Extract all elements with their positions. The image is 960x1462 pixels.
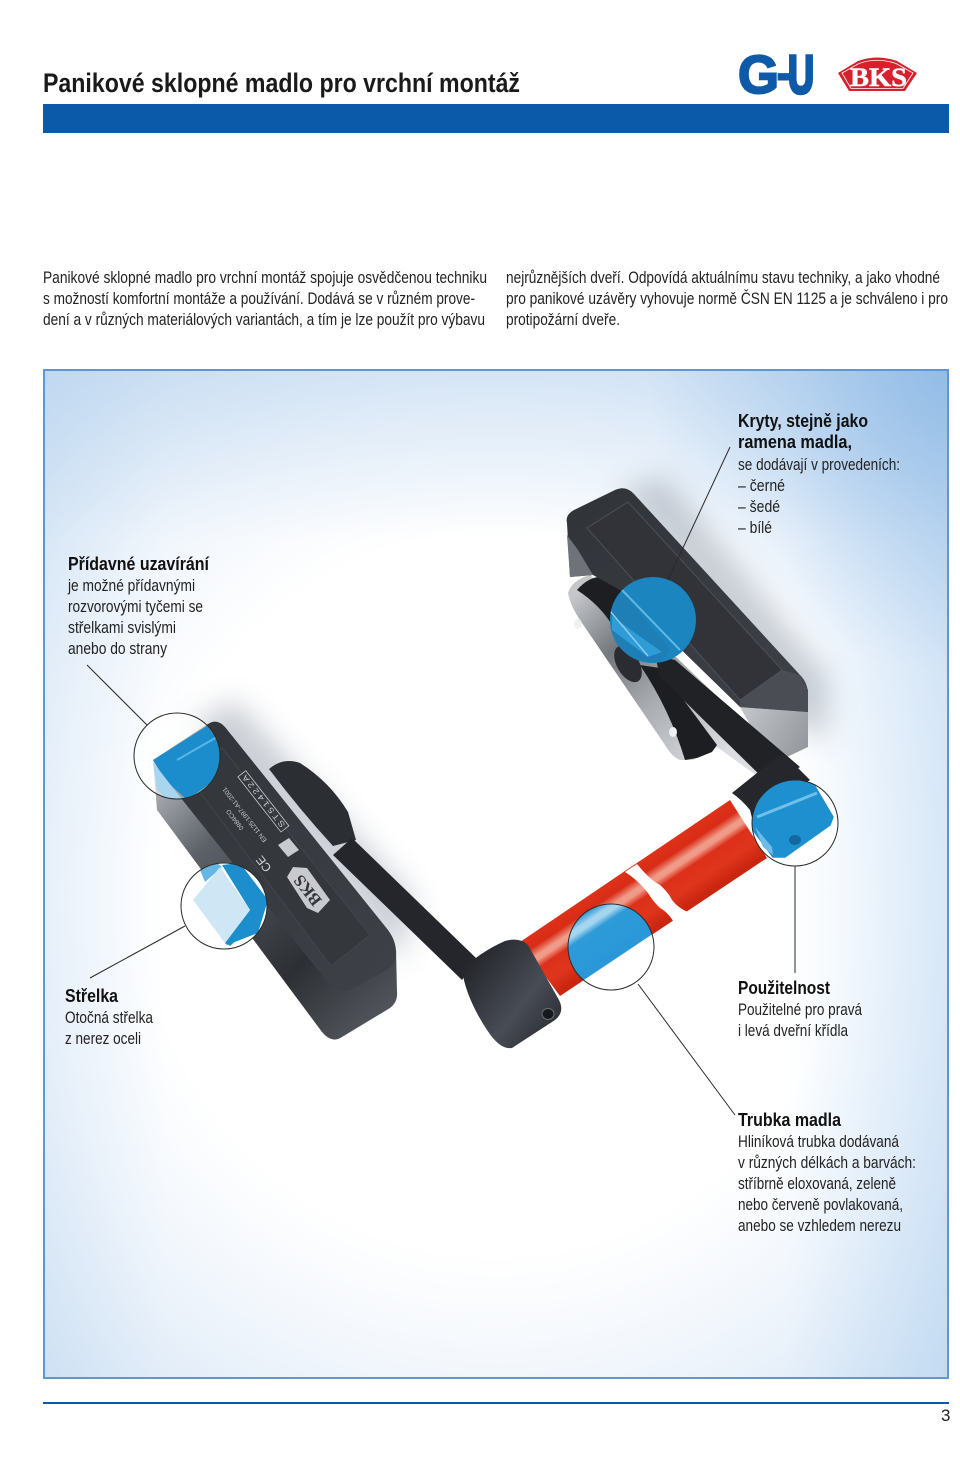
label: Kryty: ramena madla, bbox=[738, 432, 852, 452]
label: Trubka madla: anebo se vzhledem nerezu bbox=[738, 1216, 901, 1235]
lower mount: engraved marks: CE bbox=[253, 853, 274, 875]
logo: G-U: G bbox=[738, 45, 779, 105]
upper mount: top face bbox=[567, 488, 808, 712]
callout circle: Přídavné uzavírání bbox=[134, 713, 222, 801]
label: Kryty: – bílé bbox=[738, 518, 772, 537]
label: Kryty: – šedé bbox=[738, 497, 780, 516]
label: Trubka madla: Hliníková trubka dodávaná bbox=[738, 1132, 899, 1151]
upper mount: lever recess bbox=[608, 641, 648, 687]
label: Kryty bbox=[738, 411, 900, 537]
intro text right column: protipožární dveře. bbox=[506, 310, 620, 329]
intro text left column bbox=[43, 268, 487, 329]
product shadows bbox=[190, 475, 830, 960]
callout circle: Kryty bbox=[610, 577, 696, 663]
label: Trubka madla: stříbrně eloxovaná, zeleně bbox=[738, 1174, 896, 1193]
logo: G-U: U bbox=[788, 45, 814, 105]
label: Použitelnost: Použitelnost bbox=[738, 978, 830, 998]
label: Trubka madla: Trubka madla bbox=[738, 1110, 842, 1130]
label: Přídavné uzavírání: anebo do strany bbox=[68, 639, 167, 658]
upper mount: crescent bbox=[640, 665, 717, 760]
lower mount: engraved marks: BKS bbox=[290, 871, 326, 910]
lower mount: side face bbox=[153, 760, 397, 1040]
callout circle: Střelka bbox=[181, 863, 268, 949]
label: Kryty: Kryty, stejně jako bbox=[738, 411, 868, 431]
lower mount: top face bbox=[153, 722, 396, 991]
label: Střelka: Střelka bbox=[65, 986, 119, 1006]
label: Přídavné uzavírání: Přídavné uzavírání bbox=[68, 554, 210, 574]
panel: product background bbox=[43, 369, 949, 1379]
title: Panikové sklopné madlo pro vrchní montáž bbox=[43, 68, 520, 98]
label: Kryty: se dodávají v provedeních: bbox=[738, 455, 900, 474]
lower mount: pivot disc bbox=[269, 761, 356, 846]
header bar bbox=[43, 104, 949, 133]
logo: G-U: - bbox=[776, 43, 794, 103]
label: Přídavné uzavírání bbox=[67, 554, 210, 658]
right cap bbox=[732, 756, 810, 830]
upper mount: pivot disc bbox=[577, 577, 622, 625]
label: Přídavné uzavírání: je možné přídavnými bbox=[67, 576, 195, 595]
label: Trubka madla bbox=[738, 1110, 916, 1235]
upper mount: left side sheen bbox=[567, 535, 593, 577]
leader lines bbox=[87, 447, 795, 1115]
label: Střelka: Otočná střelka bbox=[65, 1008, 153, 1027]
red tube bbox=[520, 800, 767, 996]
lower mount: engraved marks bbox=[221, 771, 330, 913]
label: Použitelnost: i levá dveřní křídla bbox=[738, 1021, 848, 1040]
logo: BKS bbox=[838, 58, 917, 92]
intro text right column bbox=[506, 268, 948, 329]
label: Kryty: – černé bbox=[738, 476, 785, 495]
logo: BKS: BKS bbox=[850, 63, 907, 92]
intro text left column: s možností komfortní montáže a používání. Dodává se v různém prove- bbox=[43, 289, 475, 308]
label: Trubka madla: v různých délkách a barvách: bbox=[738, 1153, 916, 1172]
callout circle: Trubka madla bbox=[568, 904, 654, 990]
upper arm bbox=[655, 655, 800, 785]
lower mount: inset panel bbox=[187, 748, 370, 966]
lower mount: engraved marks: EN 1125:1997-A1:2001 bbox=[221, 785, 269, 843]
panic handle illustration bbox=[153, 488, 810, 1048]
label: Použitelnost bbox=[738, 978, 862, 1040]
upper mount: silver plate bbox=[568, 575, 795, 778]
plate screws bbox=[574, 619, 677, 737]
label: Střelka bbox=[65, 986, 153, 1048]
upper mount: box end bbox=[740, 707, 808, 760]
logo: G-U bbox=[738, 43, 814, 105]
intro text left column: Panikové sklopné madlo pro vrchní montáž spojuje osvědčenou techniku bbox=[43, 268, 487, 287]
label: Přídavné uzavírání: rozvorovými tyčemi se bbox=[68, 597, 203, 616]
label: Použitelnost: Použitelné pro pravá bbox=[738, 1000, 862, 1019]
lower arm bbox=[333, 838, 476, 980]
lower mount: engraved marks: 0984CO bbox=[225, 808, 246, 831]
label: Přídavné uzavírání: střelkami svislými bbox=[68, 618, 176, 637]
lower mount: engraved marks: S T 5 1 4 2 2 A bbox=[240, 772, 287, 829]
label: Trubka madla: nebo červeně povlakovaná, bbox=[738, 1195, 903, 1214]
intro text left column: dení a v různých materiálových variantách, a tím je lze použít pro výbavu bbox=[43, 310, 485, 329]
lower cap bbox=[462, 940, 561, 1048]
tube cut mark bbox=[625, 864, 688, 924]
label: Střelka: z nerez oceli bbox=[65, 1029, 141, 1048]
upper mount: inset panel bbox=[587, 502, 782, 700]
cap screw bbox=[542, 1008, 554, 1020]
footer rule bbox=[43, 1402, 949, 1404]
callout circle: Použitelnost bbox=[752, 780, 838, 866]
page number: 3 bbox=[941, 1406, 950, 1425]
upper mount: end band bbox=[740, 670, 808, 712]
